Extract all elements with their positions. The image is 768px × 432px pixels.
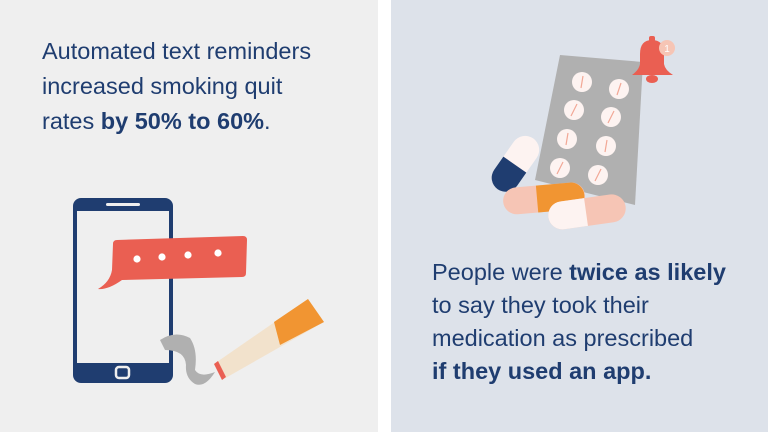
text block: smoking stat: rates by 50% to 60%. <box>42 108 271 134</box>
text block: medication stat: to say they took their <box>432 292 649 318</box>
panel: left background <box>0 0 378 432</box>
icon: capsule orange <box>502 181 586 215</box>
text block: smoking stat <box>42 38 311 134</box>
icon: phone <box>73 198 173 383</box>
text block: medication stat: People were twice as likely <box>432 259 726 285</box>
icon: speech bubble <box>98 236 247 289</box>
illustration: pills and bell <box>492 36 675 230</box>
icon: capsule pink <box>546 193 628 231</box>
text block: medication stat: if they used an app. <box>432 358 651 384</box>
text block: smoking stat: increased smoking quit <box>42 73 282 99</box>
text block: smoking stat: Automated text reminders <box>42 38 311 64</box>
icon: notification bell: 1 <box>664 44 670 55</box>
icon: notification bell <box>632 36 675 83</box>
text block: medication stat: medication as prescribed <box>432 325 693 351</box>
icon: blister pack <box>535 55 643 205</box>
illustration: phone, message, cigarette <box>73 198 324 385</box>
panel: right background <box>391 0 768 432</box>
text block: medication stat <box>432 259 726 384</box>
icon: cigarette with smoke <box>160 299 324 385</box>
icon: capsule navy <box>486 130 545 197</box>
